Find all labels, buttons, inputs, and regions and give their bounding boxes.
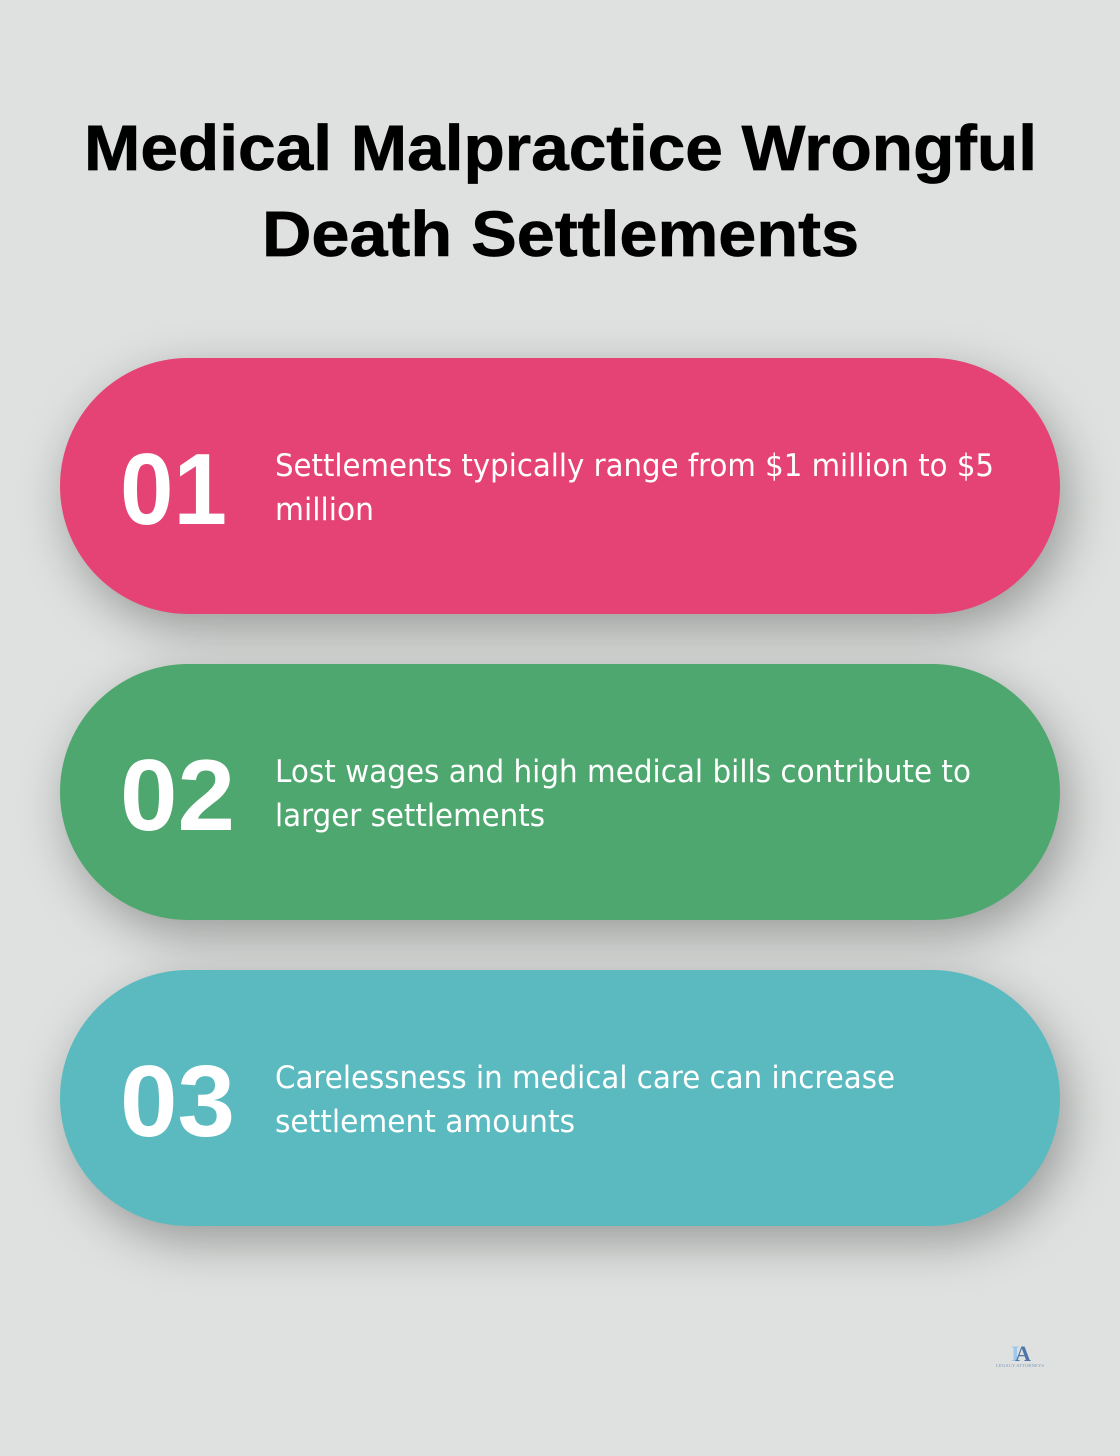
card 01 background bbox=[60, 358, 1060, 614]
card 03 text bbox=[275, 1060, 895, 1140]
icon: logo bbox=[996, 1341, 1045, 1368]
card 03 background bbox=[60, 970, 1060, 1226]
icon: logo: A bbox=[1015, 1341, 1031, 1366]
card 02 background bbox=[60, 664, 1060, 920]
panel: card 03 bbox=[60, 970, 1060, 1226]
card 02 text: larger settlements bbox=[275, 798, 545, 834]
card 01 text bbox=[275, 448, 994, 528]
icon: logo: I bbox=[1011, 1341, 1020, 1366]
icon: logo: LEGACY ATTORNEYS bbox=[996, 1363, 1045, 1368]
card 03 text: Carelessness in medical care can increase bbox=[275, 1060, 895, 1096]
card 02 number: 02 bbox=[120, 740, 235, 852]
panel: card 02 bbox=[60, 664, 1060, 920]
card 03 number: 03 bbox=[120, 1046, 235, 1158]
card 03 text: settlement amounts bbox=[275, 1104, 575, 1140]
card 02 text bbox=[275, 754, 971, 834]
title: Death Settlements bbox=[262, 198, 859, 270]
card 02 text: Lost wages and high medical bills contribute to bbox=[275, 754, 971, 790]
card 01 text: Settlements typically range from $1 million to $5 bbox=[275, 448, 994, 484]
card 01 text: million bbox=[275, 492, 374, 528]
panel: card 01 bbox=[60, 358, 1060, 614]
card 01 number: 01 bbox=[120, 434, 227, 546]
title: Medical Malpractice Wrongful bbox=[84, 112, 1037, 184]
title bbox=[84, 112, 1037, 270]
